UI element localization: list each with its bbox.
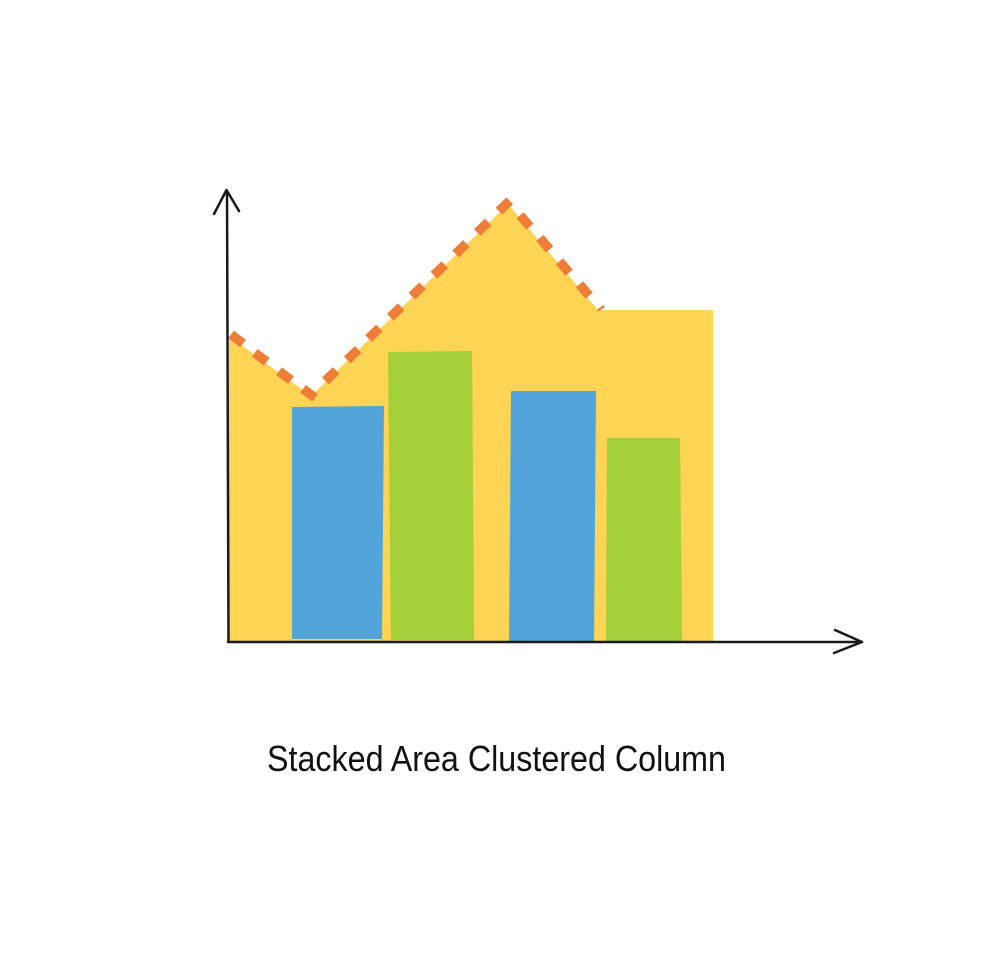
x axis arrow — [228, 630, 862, 653]
orange dashed line — [231, 201, 589, 398]
blue column 1 — [292, 406, 384, 639]
y axis arrow — [214, 190, 239, 642]
green column 2 — [606, 438, 682, 641]
orange dash end fragment — [598, 306, 604, 310]
blue column 2 — [509, 391, 596, 641]
yellow area — [229, 204, 713, 641]
green column 1 — [388, 351, 474, 640]
chart caption: Stacked Area Clustered Column — [267, 738, 726, 779]
